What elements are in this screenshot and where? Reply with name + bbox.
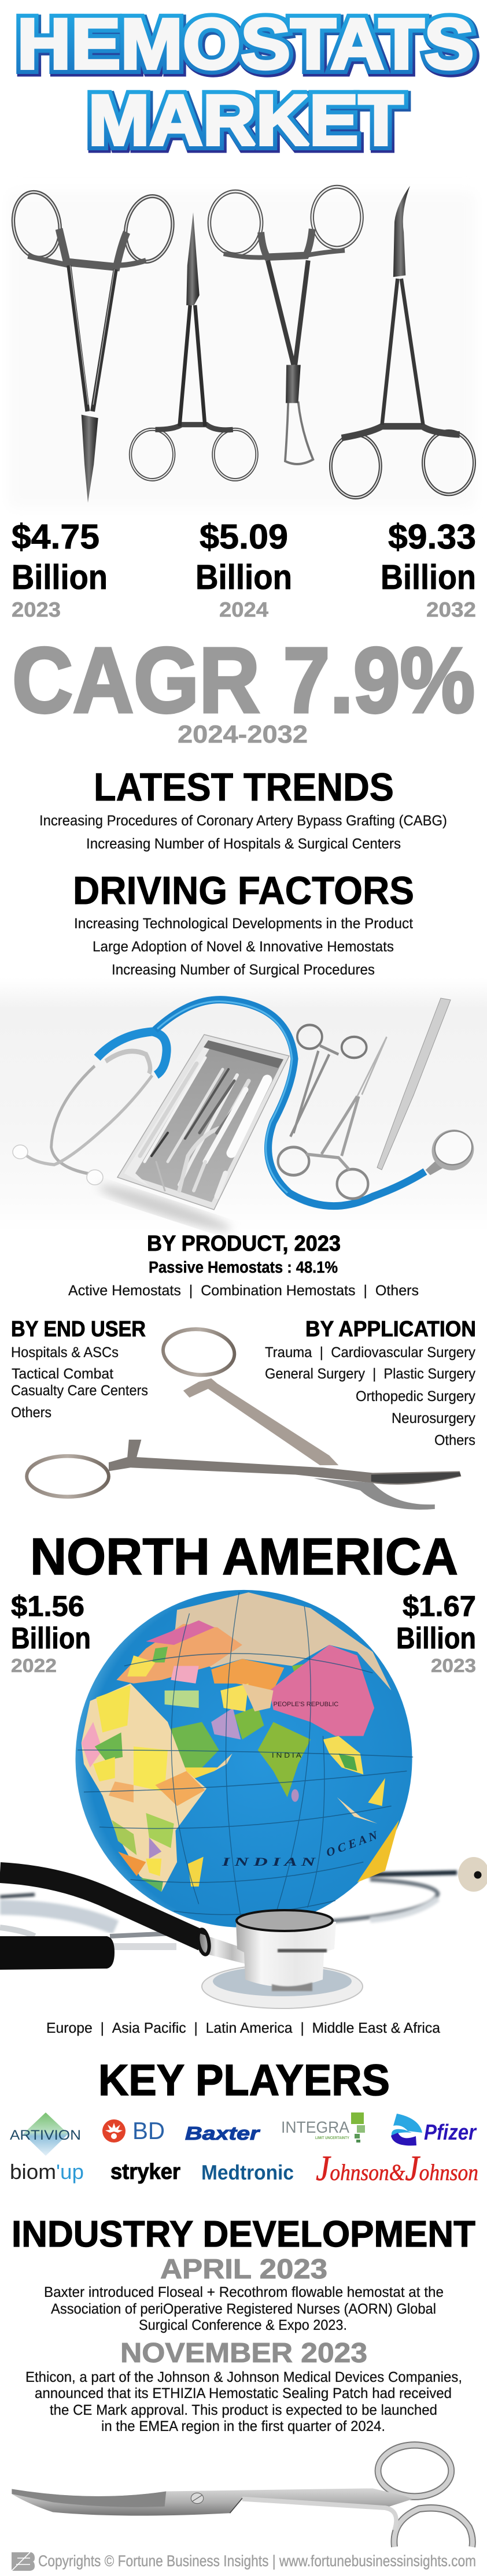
by application segment (265, 1317, 476, 1448)
stats: 2024 market size: Billion (195, 558, 292, 596)
title: MARKET (88, 81, 403, 161)
logo: Artivion: ARTIVION (10, 2127, 81, 2143)
land: india (258, 1722, 311, 1797)
north america 2023 value: Billion (396, 1622, 476, 1655)
driving factors list: Large Adoption of Novel & Innovative Hemostats (93, 939, 394, 955)
logo: Integra (281, 2112, 365, 2143)
north america 2023 value (396, 1590, 476, 1676)
stethoscope black grip (0, 1936, 115, 1970)
small hemostat (290, 1025, 367, 1137)
image: open hemostat forceps (27, 1326, 461, 1510)
April 2023 description: Surgical Conference & Expo 2023. (139, 2317, 347, 2333)
ear tips (13, 1145, 103, 1185)
land: north asia (174, 1592, 392, 1691)
title: HEMOSTATS (17, 5, 474, 84)
hemostat 3 (209, 187, 362, 464)
logo: biom'up (10, 2160, 84, 2184)
title: MARKET (88, 81, 403, 161)
by application segment: BY APPLICATION (305, 1317, 476, 1341)
by end user segment (11, 1317, 148, 1421)
driving factors list: Increasing Number of Surgical Procedures (112, 962, 375, 978)
April 2023 description (44, 2284, 444, 2333)
by end user segment: BY END USER (11, 1317, 146, 1341)
back stethoscope tube (0, 1873, 457, 1928)
title: MARKET (90, 82, 405, 162)
driving factors heading: DRIVING FACTORS (73, 869, 414, 913)
November 2023 description: announced that its ETHIZIA Hemostatic Sealing Patch had received (35, 2385, 452, 2401)
stethoscope ear tubes (25, 1051, 152, 1174)
logo: Pfizer (391, 2114, 477, 2145)
graticule (78, 1592, 413, 1925)
logo: biom'up: 'up (56, 2160, 84, 2184)
stats: 2032 market size: $9.33 (388, 517, 476, 556)
latest trends heading: LATEST TRENDS (94, 765, 394, 809)
latest trends list (39, 813, 447, 852)
November 2023 description: in the EMEA region in the first quarter of 2024. (101, 2418, 385, 2434)
logo: Artivion (10, 2112, 81, 2156)
title: HEMOSTATS (19, 6, 475, 86)
connector (200, 1933, 246, 1964)
north america 2022 value: Billion (11, 1622, 91, 1655)
title (17, 5, 475, 162)
stats: 2032 market size: 2032 (426, 598, 476, 621)
by end user segment: Tactical Combat (12, 1366, 113, 1382)
image: surgical scissors (12, 2445, 473, 2547)
by application segment: Neurosurgery (392, 1410, 475, 1426)
globe: I N D I A (272, 1752, 301, 1759)
industry development heading: INDUSTRY DEVELOPMENT (12, 2213, 475, 2255)
north america 2023 value: $1.67 (403, 1590, 476, 1622)
footer logo (12, 2552, 35, 2571)
logo: Medtronic: Medtronic (201, 2160, 294, 2184)
stats: 2023 market size: 2023 (12, 598, 61, 621)
land: middle east (165, 1684, 274, 1781)
body (236, 1922, 336, 1987)
stats: 2024 market size: $5.09 (200, 517, 288, 556)
stethoscope silver wires (0, 1928, 176, 1947)
April 2023 description: Association of periOperative Registered Nurses (AORN) Global (51, 2301, 436, 2317)
CAGR period: 2024-2032 (178, 721, 308, 748)
land: central asia (211, 1659, 284, 1691)
other regions: Europe | Asia Pacific | Latin America | Middle East & Africa (46, 2020, 440, 2036)
large hemostat in image (278, 1037, 387, 1199)
lower disc (202, 1965, 363, 2008)
stats: 2032 market size (381, 517, 476, 621)
logo: Johnson & Johnson: Johnson&Johnson (316, 2149, 478, 2188)
north america 2022 value (11, 1590, 91, 1676)
chest piece (426, 1126, 476, 1175)
land: china (270, 1645, 374, 1736)
by end user segment: Others (11, 1404, 51, 1421)
dominant product share: Passive Hemostats : 48.1% (149, 1258, 338, 1276)
logo: Stryker: stryker (110, 2160, 180, 2184)
by product heading: BY PRODUCT, 2023 (147, 1232, 341, 1256)
by application segment: General Surgery | Plastic Surgery (265, 1366, 475, 1382)
logo: BD: BD (132, 2117, 165, 2144)
north america 2022 value: 2022 (11, 1655, 57, 1676)
head (237, 1910, 333, 1931)
land: europe (116, 1621, 242, 1684)
image: stethoscope, tray and instruments (0, 978, 487, 1237)
tray (97, 1035, 289, 1237)
globe labels: I N D I A N (222, 1855, 316, 1869)
driving factors list: Increasing Technological Developments in the Product (74, 916, 413, 932)
hemostat 1 (8, 187, 179, 412)
by application segment: Trauma | Cardiovascular Surgery (265, 1344, 475, 1361)
logo: BD (102, 2117, 165, 2144)
stats: 2024 market size (195, 517, 292, 621)
November 2023 date: NOVEMBER 2023 (120, 2338, 367, 2369)
land: southeast asia (323, 1736, 363, 1774)
logo: biom'up: biom (10, 2160, 56, 2184)
stats: 2023 market size: Billion (12, 558, 108, 596)
driving factors list (74, 916, 413, 978)
land: madagascar (188, 1857, 204, 1886)
April 2023 date: APRIL 2023 (160, 2254, 327, 2285)
land: mongolia (292, 1659, 337, 1684)
latest trends list: Increasing Procedures of Coronary Artery Bypass Grafting (CABG) (39, 813, 447, 829)
hemostat 2 (131, 305, 257, 480)
north america 2022 value: $1.56 (11, 1590, 84, 1622)
stethoscope blue yoke (97, 1032, 167, 1075)
stats: 2024 market size: 2024 (219, 598, 268, 621)
hemostat 4 (331, 279, 474, 498)
key players heading: KEY PLAYERS (98, 2056, 390, 2105)
November 2023 description: Ethicon, a part of the Johnson & Johnson Medical Devices Companies, (25, 2369, 462, 2385)
land: australia edge (357, 1820, 399, 1882)
ear tip right (458, 1857, 487, 1892)
image: four surgical hemostats on white (8, 186, 475, 507)
stats: 2032 market size: Billion (381, 558, 476, 596)
north america heading: NORTH AMERICA (30, 1528, 458, 1586)
title: HEMOSTATS (17, 5, 474, 84)
by application segment: Others (434, 1432, 475, 1448)
November 2023 description: the CE Mark approval. This product is expected to be launched (50, 2402, 437, 2418)
globe (75, 1590, 413, 1928)
tweezers (377, 998, 451, 1170)
by end user segment: Hospitals & ASCs (11, 1344, 119, 1361)
logo: Integra: LIMIT UNCERTAINTY (315, 2136, 349, 2140)
globe labels (222, 1829, 379, 1869)
blue tube (155, 1000, 425, 1206)
globe: PEOPLE'S REPUBLIC (274, 1700, 338, 1708)
north america 2023 value: 2023 (431, 1655, 476, 1676)
April 2023 description: Baxter introduced Floseal + Recothrom flowable hemostat at the (44, 2284, 444, 2300)
globe labels: O C E A N (325, 1829, 379, 1859)
logo: Baxter: Baxter (185, 2123, 260, 2144)
by end user segment: Casualty Care Centers (11, 1382, 148, 1399)
stats: 2023 market size (12, 517, 108, 621)
stethoscope black tube (0, 1873, 202, 1941)
image: globe with stethoscope (0, 1590, 487, 2008)
land: sri lanka (292, 1789, 299, 1802)
by application segment: Orthopedic Surgery (356, 1388, 475, 1404)
other product types: Active Hemostats | Combination Hemostats | Others (68, 1283, 419, 1299)
stats: 2023 market size: $4.75 (12, 517, 99, 556)
logo: Pfizer: Pfizer (424, 2121, 477, 2145)
stethoscope chest piece (196, 1910, 363, 2008)
logo: Integra: INTEGRA (281, 2118, 349, 2136)
land: africa (82, 1684, 206, 1892)
November 2023 description (25, 2369, 462, 2434)
latest trends list: Increasing Number of Hospitals & Surgical Centers (86, 836, 401, 852)
